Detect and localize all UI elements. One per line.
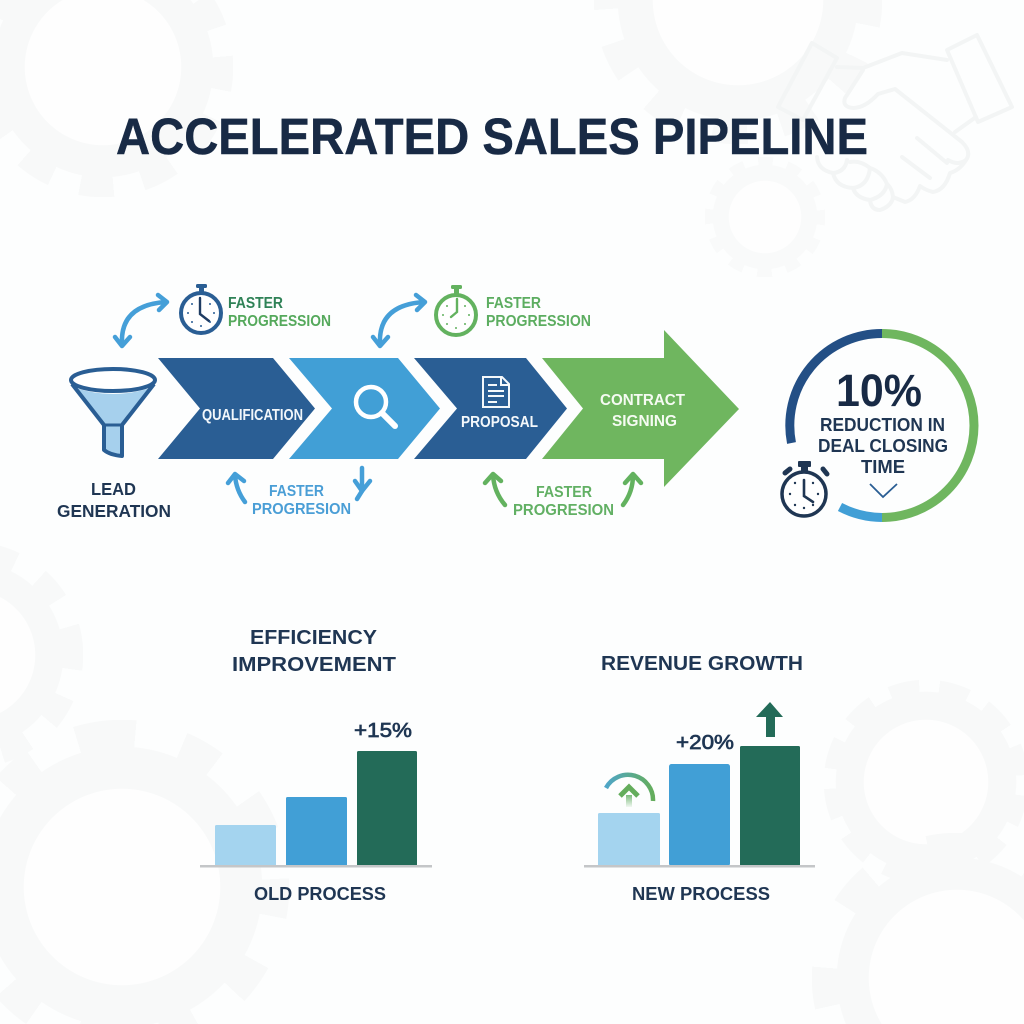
arrow: contract signing: [542, 330, 739, 487]
label: faster progression bottom 2: PROGRESION: [513, 502, 614, 519]
label: faster progression top 2: [486, 295, 591, 330]
chevron: search step: [289, 358, 440, 459]
chevron: proposal: PROPOSAL: [461, 414, 538, 431]
chart title: REVENUE GROWTH: [601, 652, 803, 675]
label: faster progression top 1: PROGRESSION: [228, 313, 331, 330]
label: faster progression top 2: FASTER: [486, 295, 541, 312]
label: faster progression bottom 1: PROGRESION: [252, 501, 351, 518]
icon: document: [483, 377, 509, 407]
title: ACCELERATED SALES PIPELINE: [116, 108, 868, 165]
gear: top centre: [594, 0, 882, 144]
arrow: contract signing: CONTRACT: [600, 392, 685, 409]
ring segments: [790, 333, 974, 518]
axis: [200, 865, 432, 868]
arrow: bottom left up: [228, 474, 245, 502]
icon: up arrow: [756, 702, 783, 737]
category label: OLD PROCESS: [254, 884, 386, 904]
label: faster progression bottom 2: [513, 484, 614, 519]
gear: left middle: [0, 542, 83, 768]
gear: bottom right: [812, 833, 1024, 1024]
big number: 10%: [836, 365, 922, 416]
chart title: IMPROVEMENT: [232, 653, 397, 676]
bars: [215, 751, 417, 866]
infographic frame: [58, 33, 1014, 900]
caption: DEAL CLOSING: [818, 436, 948, 456]
label: faster progression bottom 1: [252, 483, 351, 518]
caption: REDUCTION IN: [820, 415, 945, 435]
chart title: EFFICIENCY: [250, 626, 377, 649]
icon: stopwatch: [782, 461, 827, 516]
icon: green stopwatch: [436, 285, 476, 335]
arrow: top left curved: [115, 295, 167, 346]
arrow: top middle curved: [373, 295, 425, 346]
chart: revenue growth: [584, 652, 815, 904]
chevron: proposal: [414, 358, 567, 459]
axis: [584, 865, 815, 868]
label: lead generation: [57, 479, 171, 521]
arrow: bottom right green left: [485, 474, 505, 505]
caption: [818, 415, 948, 477]
gear: bottom left: [0, 720, 289, 1024]
icon: navy stopwatch: [181, 284, 221, 333]
chevron down: [870, 484, 897, 497]
label: lead generation: GENERATION: [57, 501, 171, 521]
gear: small under title: [705, 157, 825, 277]
label: faster progression bottom 2: FASTER: [536, 484, 592, 501]
label: faster progression top 1: [228, 295, 331, 330]
label: faster progression top 1: FASTER: [228, 295, 283, 312]
pipeline flow: [158, 330, 739, 487]
value label: +15%: [354, 720, 412, 742]
chart: efficiency improvement: [200, 626, 432, 904]
category label: NEW PROCESS: [632, 884, 770, 904]
chevron: qualification: QUALIFICATION: [202, 407, 303, 424]
chevron: qualification: [158, 358, 315, 459]
label: lead generation: LEAD: [91, 479, 136, 499]
gear: top left: [0, 0, 233, 197]
label: faster progression bottom 1: FASTER: [269, 483, 324, 500]
arrow: bottom left down: [355, 468, 370, 499]
gear: right: [824, 680, 1024, 884]
icon: handshake watermark: [778, 35, 1012, 210]
arrow: bottom right green right: [623, 474, 641, 505]
icon: funnel: [71, 369, 155, 456]
bars: [598, 746, 800, 866]
icon: magnifying glass: [356, 387, 395, 426]
arrow: contract signing: SIGNING: [612, 413, 677, 430]
chart title: [232, 626, 397, 676]
icon: gauge arc with up chevron: [606, 775, 653, 807]
caption: TIME: [861, 457, 905, 477]
value label: +20%: [676, 732, 734, 754]
label: faster progression top 2: PROGRESSION: [486, 313, 591, 330]
kpi ring: 10% reduction: [782, 333, 974, 518]
